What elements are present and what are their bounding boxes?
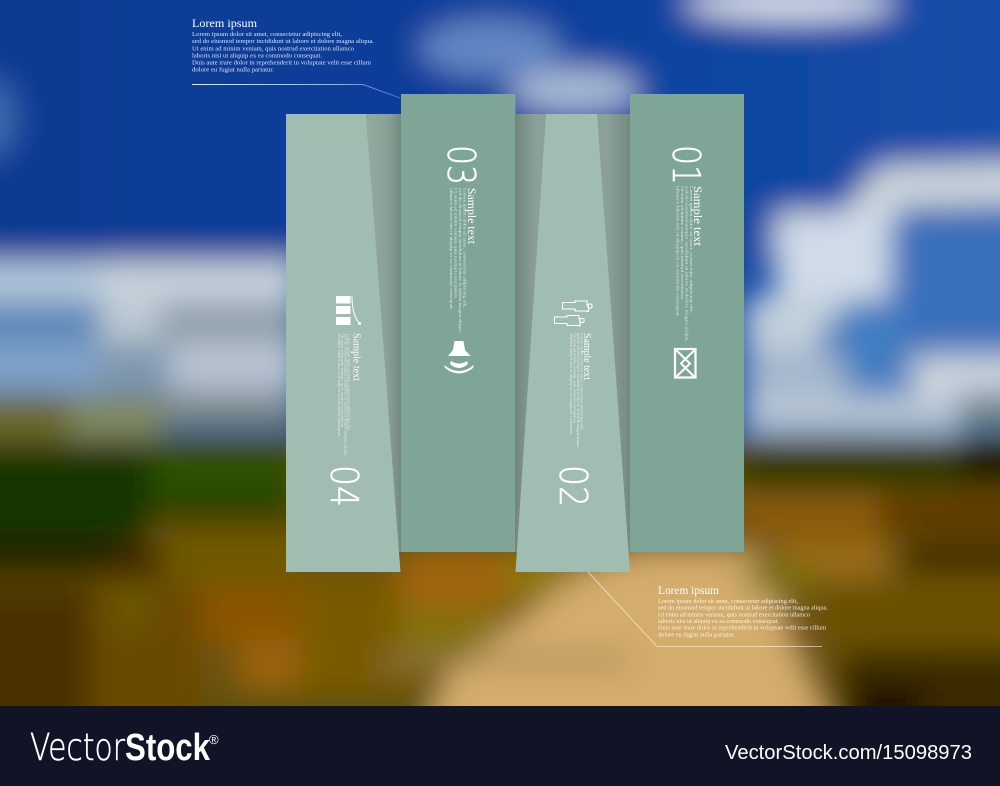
body text	[658, 599, 829, 638]
body text	[569, 333, 584, 448]
icon: bar steps	[336, 296, 361, 325]
body text: ullamco laboris nisi ut aliquip ex ea commodo consequat.	[337, 334, 341, 437]
callout: top text block	[192, 16, 400, 98]
road	[420, 552, 835, 740]
body text: sed do eiusmod tempor incididunt ut labore et dolore magna aliqua.	[343, 334, 347, 456]
number: 01	[664, 145, 708, 185]
heading: Sample text	[691, 186, 705, 247]
leader line	[588, 572, 822, 646]
body text: Ut enim ad minim veniam, quis nostrud exercitation ullamco	[658, 612, 810, 618]
heading: Sample text	[465, 188, 477, 245]
light face	[516, 114, 630, 572]
right clouds: top	[685, 0, 895, 21]
body text: dolore eu fugiat nulla pariatur.	[192, 67, 274, 74]
body text: Ut enim ad minim veniam, quis nostrud exercitation ullamco	[192, 45, 354, 52]
panel 02	[515, 114, 630, 572]
body text	[676, 186, 694, 342]
body text: Ut enim ad minim veniam, quis nostrud exercitation	[452, 188, 458, 298]
body text	[449, 188, 468, 333]
body text: Duis aute irure dolor in reprehenderit in voluptate velit esse cillum	[192, 60, 371, 66]
callout: bottom text block	[588, 572, 829, 646]
icon: two bottles	[554, 301, 592, 326]
left clouds	[0, 260, 100, 302]
logo: Stock	[125, 727, 211, 769]
footer bar	[0, 706, 1000, 786]
body text: ullamco laboris nisi ut aliquip ex ea commodo consequat.	[569, 333, 573, 435]
body text: dolore eu fugiat nulla pariatur.	[658, 631, 736, 638]
heading: Lorem ipsum	[192, 16, 258, 30]
body text	[337, 334, 350, 456]
left dark patches	[0, 536, 140, 576]
orange foreground	[0, 585, 90, 765]
body text: Lorem ipsum dolor sit amet, consectetur adipiscing elit,	[346, 334, 350, 431]
panel 01	[630, 94, 744, 552]
folded shadow strip	[515, 114, 630, 552]
body text: Lorem ipsum dolor sit amet, consectetur adipiscing elit,	[688, 186, 694, 313]
right dark field	[735, 452, 975, 486]
main face	[630, 94, 744, 552]
body text: Lorem ipsum dolor sit amet, consectetur adipiscing elit,	[462, 188, 468, 308]
body text: Ut enim ad minim veniam, quis nostrud exercitation	[572, 333, 576, 423]
body text: Lorem ipsum dolor sit amet, consectetur adipiscing elit,	[192, 31, 342, 38]
body text: Ut enim ad minim veniam, quis nostrud exercitation	[339, 334, 344, 427]
body text: sed do eiusmod tempor incididunt ut labore et dolore magna aliqua.	[192, 38, 374, 45]
body text: Ut enim ad minim veniam, quis nostrud exercitation	[679, 186, 685, 299]
icon: bell	[444, 341, 474, 374]
body text: sed do eiusmod tempor incididunt ut labore et dolore magna aliqua.	[576, 333, 580, 448]
heading: Sample text	[581, 333, 592, 380]
number: 04	[322, 465, 366, 507]
body text: ullamco laboris nisi ut aliquip ex ea commodo consequat.	[676, 186, 680, 317]
body text: sed do eiusmod tempor incididunt ut labore et dolore magna aliqua.	[658, 606, 829, 612]
main face	[401, 94, 516, 552]
right cloud streak	[840, 160, 1000, 250]
right cloud block	[775, 212, 890, 300]
icon: envelope	[675, 349, 696, 378]
leader line	[192, 84, 400, 98]
number: 02	[551, 465, 595, 507]
left horizon	[0, 396, 70, 438]
panel 03	[401, 94, 516, 552]
body text: ullamco laboris nisi ut aliquip ex ea commodo consequat.	[449, 188, 454, 310]
logo: ®	[209, 732, 219, 747]
light face	[286, 114, 400, 572]
number: 03	[439, 145, 483, 185]
body text: Lorem ipsum dolor sit amet, consectetur adipiscing elit,	[578, 333, 584, 430]
body text: sed do eiusmod tempor incididunt ut labore et dolore magna aliqua.	[458, 188, 463, 333]
body text: Lorem ipsum dolor sit amet, consectetur adipiscing elit,	[658, 599, 799, 605]
folded shadow strip	[366, 114, 401, 552]
heading: Sample text	[350, 333, 362, 381]
panel 04	[286, 114, 401, 572]
ground base	[0, 440, 1000, 780]
logo	[30, 726, 219, 769]
body text: Duis aute irure dolor in reprehenderit in voluptate velit esse cillum	[658, 626, 826, 632]
body text: laboris nisi ut aliquip ex ea commodo consequat.	[192, 52, 322, 59]
right low clouds	[910, 354, 1000, 394]
right sky blues	[840, 215, 1000, 350]
body text	[192, 31, 374, 74]
heading: Lorem ipsum	[658, 585, 719, 597]
body text: laboris nisi ut aliquip ex ea commodo consequat.	[658, 619, 780, 625]
body text: sed do eiusmod tempor incididunt ut labore et dolore magna aliqua.	[684, 186, 690, 342]
top centre clouds	[0, 78, 16, 158]
image id: VectorStock.com/15098973	[725, 741, 972, 764]
logo: Vector	[30, 726, 126, 769]
left green field	[0, 446, 150, 536]
